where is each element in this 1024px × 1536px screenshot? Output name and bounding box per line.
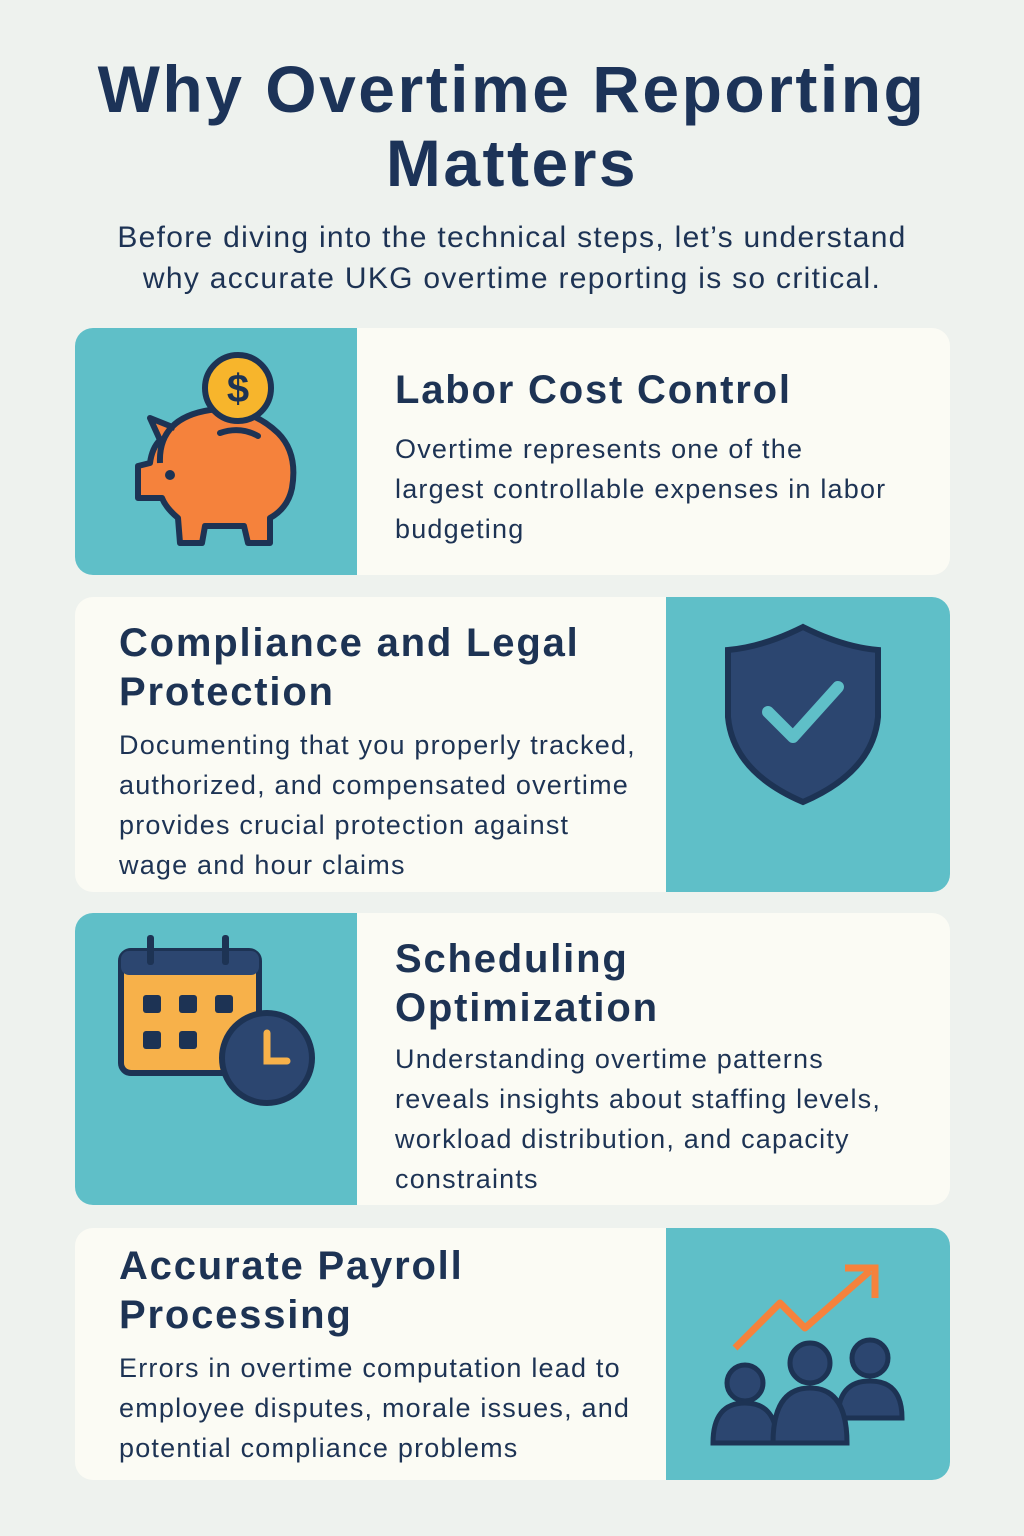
heading <box>119 621 580 714</box>
subtitle: Before diving into the technical steps, let’s understand <box>117 221 907 254</box>
title <box>98 52 926 200</box>
body text <box>119 1353 630 1463</box>
body text <box>395 1044 881 1194</box>
body text: largest controllable expenses in labor <box>395 474 886 504</box>
title: Why Overtime Reporting <box>98 52 926 126</box>
icon: calendar clock <box>118 935 315 1106</box>
body text <box>119 730 636 880</box>
body text: wage and hour claims <box>119 850 406 880</box>
icon: shield <box>725 624 881 806</box>
heading <box>395 937 659 1030</box>
panel: labor cost control <box>75 328 950 575</box>
body text: authorized, and compensated overtime <box>119 770 629 800</box>
body text: employee disputes, morale issues, and <box>119 1393 630 1423</box>
body text: Documenting that you properly tracked, <box>119 730 636 760</box>
subtitle <box>117 221 907 295</box>
heading: Compliance and Legal <box>119 621 580 665</box>
panel: scheduling <box>75 913 950 1205</box>
body text: constraints <box>395 1164 539 1194</box>
body text: Understanding overtime patterns <box>395 1044 824 1074</box>
heading: Accurate Payroll <box>119 1244 464 1288</box>
heading <box>119 1244 464 1337</box>
icon: piggy bank: $ <box>227 367 249 411</box>
icon: people with trend arrow <box>710 1264 904 1446</box>
heading: Labor Cost Control <box>395 368 792 412</box>
panel: compliance <box>75 597 950 892</box>
body text: Errors in overtime computation lead to <box>119 1353 621 1383</box>
heading: Scheduling <box>395 937 629 981</box>
body text: budgeting <box>395 514 524 544</box>
icon: piggy bank <box>135 352 296 546</box>
title: Matters <box>386 126 638 200</box>
heading: Protection <box>119 670 335 714</box>
body text: workload distribution, and capacity <box>395 1124 850 1154</box>
body text: potential compliance problems <box>119 1433 518 1463</box>
body text: provides crucial protection against <box>119 810 569 840</box>
heading: Optimization <box>395 986 659 1030</box>
body text <box>395 434 886 544</box>
body text: Overtime represents one of the <box>395 434 803 464</box>
heading: Processing <box>119 1293 353 1337</box>
subtitle: why accurate UKG overtime reporting is so critical. <box>143 262 881 295</box>
panel: payroll <box>75 1228 950 1480</box>
body text: reveals insights about staffing levels, <box>395 1084 881 1114</box>
